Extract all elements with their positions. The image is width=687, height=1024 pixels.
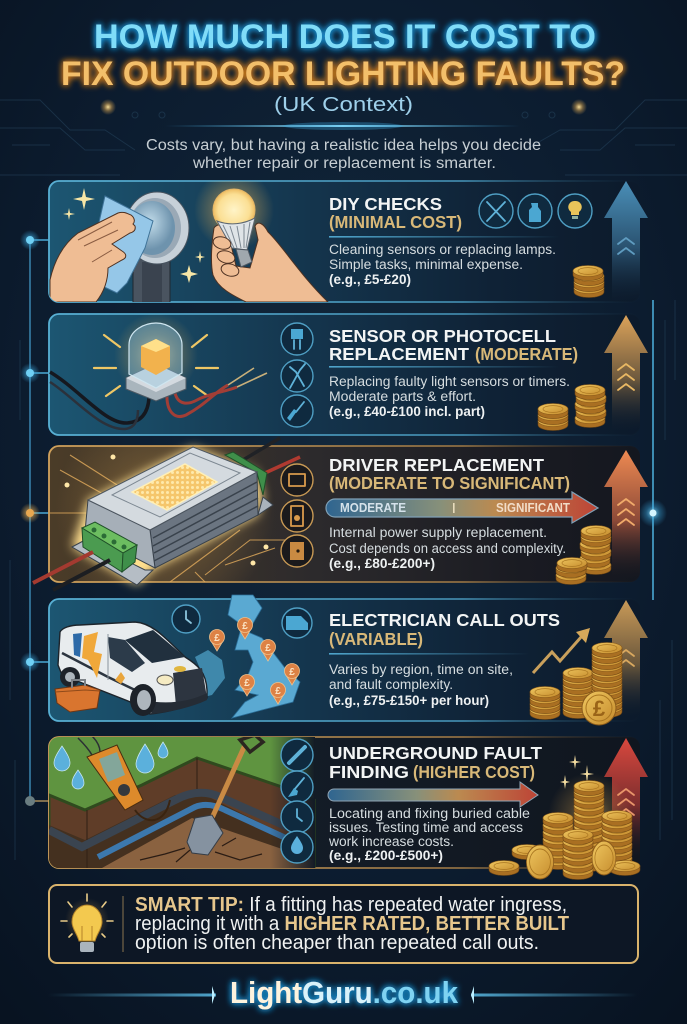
description: (e.g., £40-£100 incl. part) bbox=[329, 404, 485, 419]
tip text bbox=[135, 893, 569, 954]
description bbox=[328, 806, 530, 863]
heading: DIY CHECKS bbox=[329, 194, 442, 214]
title: HOW MUCH DOES IT COST TO bbox=[94, 18, 596, 56]
right connector line bbox=[639, 300, 667, 600]
panel: driver replacement bbox=[32, 436, 648, 592]
footer logo bbox=[48, 975, 637, 1010]
heading: UNDERGROUND FAULT bbox=[329, 743, 542, 763]
description: (e.g., £80-£200+) bbox=[329, 556, 435, 571]
heading: SENSOR OR PHOTOCELL bbox=[329, 326, 556, 346]
tip text: replacing it with a HIGHER RATED, BETTER BUILT bbox=[135, 912, 569, 935]
illustration: UK map with price pins: £ bbox=[242, 621, 248, 632]
coins bbox=[556, 526, 611, 584]
heading: DRIVER REPLACEMENT bbox=[329, 455, 544, 475]
description bbox=[329, 662, 513, 708]
illustration: cleaning sensor and LED bulb bbox=[50, 170, 328, 304]
heading: (VARIABLE) bbox=[329, 629, 423, 649]
icon column bbox=[281, 323, 313, 427]
panel: DIY checks bbox=[49, 170, 648, 304]
title bbox=[61, 18, 625, 93]
illustration: photocell with wires bbox=[50, 313, 267, 429]
description: Locating and fixing buried cable bbox=[329, 806, 530, 821]
description: (e.g., £200-£500+) bbox=[329, 848, 443, 863]
coins bbox=[538, 384, 606, 430]
illustration: UK map with price pins bbox=[195, 595, 300, 718]
scale arrow: moderate to significant: MODERATE bbox=[340, 501, 406, 515]
intro text bbox=[146, 137, 541, 172]
icon: van bbox=[282, 608, 312, 638]
illustration: LED driver bbox=[32, 436, 301, 592]
smart tip box bbox=[49, 885, 638, 963]
scale arrow: moderate to significant: SIGNIFICANT bbox=[496, 501, 570, 515]
panel: electrician call outs bbox=[49, 595, 648, 725]
title: FIX OUTDOOR LIGHTING FAULTS? bbox=[61, 55, 625, 93]
icon: clock bbox=[172, 605, 200, 633]
panel: underground fault finding bbox=[49, 735, 648, 880]
description: (e.g., £75-£150+ per hour) bbox=[329, 693, 489, 708]
description: Varies by region, time on site, bbox=[329, 662, 513, 677]
description: issues. Testing time and access bbox=[329, 820, 523, 835]
illustration: UK map with price pins: £ bbox=[289, 667, 295, 678]
amber nodes bbox=[100, 99, 587, 115]
heading: (HIGHER COST) bbox=[413, 762, 535, 782]
illustration: dig, cable, multimeter bbox=[49, 735, 315, 868]
coins: £ bbox=[593, 696, 606, 721]
description: Internal power supply replacement. bbox=[329, 525, 547, 540]
illustration: toolbox bbox=[55, 680, 100, 712]
cost label: (MINIMAL COST) bbox=[329, 212, 462, 232]
description: (e.g., £5-£20) bbox=[329, 272, 411, 287]
heading bbox=[329, 610, 560, 649]
glowing divider bbox=[165, 122, 520, 130]
description: Replacing faulty light sensors or timers. bbox=[329, 374, 570, 389]
illustration: UK map with price pins: £ bbox=[244, 678, 250, 689]
icon column bbox=[281, 739, 313, 863]
coins bbox=[573, 266, 604, 298]
intro text: whether repair or replacement is smarter. bbox=[192, 155, 496, 172]
heading bbox=[329, 326, 578, 364]
heading: FINDING bbox=[329, 762, 409, 782]
arrow: blue bbox=[604, 181, 648, 302]
description: Moderate parts & effort. bbox=[329, 389, 476, 404]
heading: ELECTRICIAN CALL OUTS bbox=[329, 610, 560, 630]
illustration: electrician van bbox=[58, 622, 207, 716]
arrow: gold bbox=[604, 315, 648, 430]
coins bbox=[530, 642, 622, 725]
description: Cost depends on access and complexity. bbox=[329, 541, 566, 556]
icon: light bulb bbox=[61, 894, 113, 952]
description bbox=[329, 242, 556, 287]
description: Cleaning sensors or replacing lamps. bbox=[329, 242, 556, 257]
illustration: UK map with price pins: £ bbox=[265, 643, 271, 654]
footer logo: LightGuru.co.uk bbox=[230, 975, 459, 1010]
description bbox=[329, 374, 570, 419]
illustration: UK map with price pins: £ bbox=[275, 686, 281, 697]
heading: (MODERATE TO SIGNIFICANT) bbox=[329, 473, 570, 493]
arrow: orange-red bbox=[604, 450, 648, 578]
heading bbox=[329, 743, 542, 782]
coins bbox=[489, 755, 640, 880]
description bbox=[329, 525, 566, 571]
heading bbox=[329, 455, 570, 493]
tip text: SMART TIP: If a fitting has repeated water ingress, bbox=[135, 893, 567, 916]
cost gradient arrow bbox=[328, 782, 538, 807]
intro text: Costs vary, but having a realistic idea helps you decide bbox=[146, 137, 541, 154]
arrow: red bbox=[604, 738, 648, 860]
tip text: option is often cheaper than repeated call outs. bbox=[135, 931, 539, 954]
heading: REPLACEMENT bbox=[329, 344, 469, 364]
circuit decoration bbox=[0, 100, 687, 860]
left connector line bbox=[20, 230, 49, 806]
description: Simple tasks, minimal expense. bbox=[329, 257, 523, 272]
arrow: gold bbox=[604, 600, 648, 716]
icon row: tools, spray, bulb bbox=[479, 194, 592, 228]
trend arrow bbox=[533, 628, 590, 673]
scale arrow: moderate to significant bbox=[326, 492, 598, 523]
subtitle: (UK Context) bbox=[274, 94, 413, 116]
illustration: UK map with price pins: £ bbox=[214, 633, 220, 644]
panel: sensor or photocell bbox=[49, 313, 648, 435]
icon column bbox=[281, 464, 313, 567]
description: work increase costs. bbox=[328, 834, 454, 849]
heading: (MODERATE) bbox=[475, 344, 578, 364]
description: and fault complexity. bbox=[329, 677, 453, 692]
